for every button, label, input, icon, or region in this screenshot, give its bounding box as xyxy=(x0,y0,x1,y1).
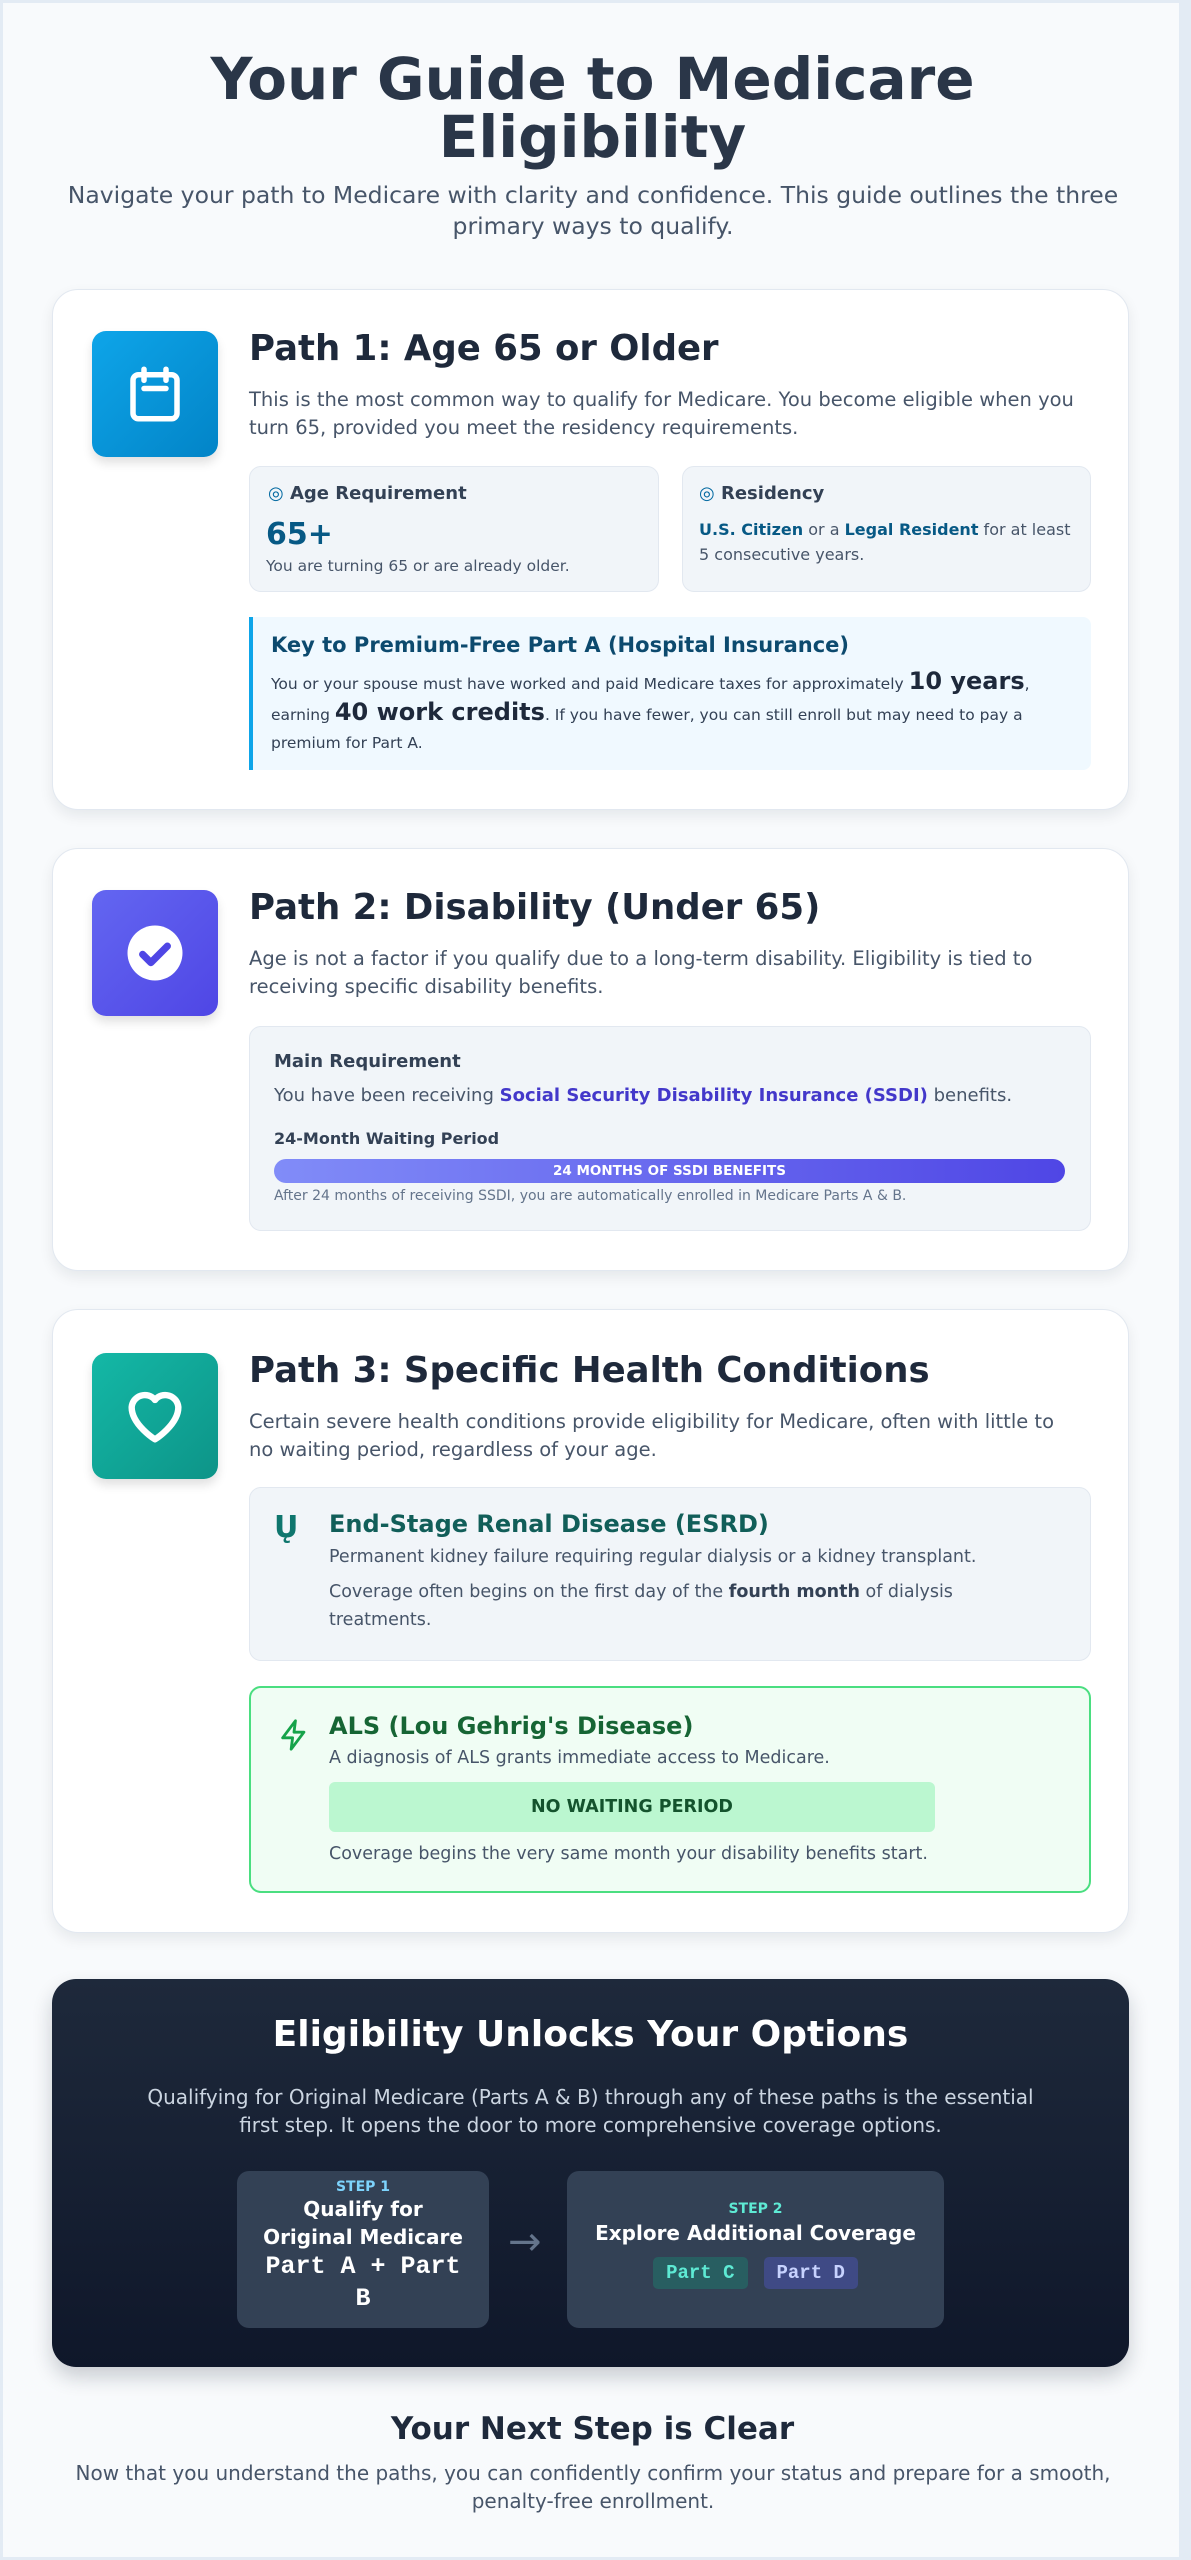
step 1: Original Medicare xyxy=(263,2225,463,2249)
requirement box xyxy=(249,1026,1091,1231)
heading: Path 3: Specific Health Conditions xyxy=(249,1350,930,1391)
footer text: Now that you understand the paths, you can confidently confirm your status and prepare for a smooth, penalty-free enrollment. xyxy=(76,2461,1110,2513)
heading: Eligibility Unlocks Your Options xyxy=(273,2014,908,2055)
panel: path 1 xyxy=(52,289,1129,810)
panel: eligibility unlocks options xyxy=(52,1979,1129,2367)
requirement box: Main Requirement xyxy=(274,1051,461,1072)
ESRD box: Permanent kidney failure requiring regular dialysis or a kidney transplant. xyxy=(329,1547,976,1567)
age requirement box xyxy=(249,466,659,592)
residency box: U.S. Citizen or a Legal Resident for at least 5 consecutive years. xyxy=(699,520,1071,564)
residency box xyxy=(682,466,1091,592)
title xyxy=(210,45,975,171)
progress bar: 24 MONTHS OF SSDI BENEFITS xyxy=(553,1163,786,1179)
step 2: STEP 2 xyxy=(728,2201,783,2217)
ESRD box: End-Stage Renal Disease (ESRD) xyxy=(329,1510,769,1538)
ESRD box: Coverage often begins on the first day of the fourth month of dialysis treatments. xyxy=(329,1582,953,1630)
step 1 xyxy=(237,2171,489,2328)
callout: premium-free part A: Key to Premium-Free Part A (Hospital Insurance) xyxy=(271,633,849,657)
step 1: Qualify for xyxy=(303,2197,423,2221)
text: Qualifying for Original Medicare (Parts A & B) through any of these paths is the essential first step. It opens the door to more comprehensive coverage options. xyxy=(147,2085,1034,2137)
badge: no waiting period xyxy=(329,1782,935,1832)
icon: calendar xyxy=(92,331,218,457)
residency box: ◎ Residency xyxy=(699,483,824,504)
icon: lightning xyxy=(281,1719,306,1751)
badge: no waiting period: NO WAITING PERIOD xyxy=(531,1797,733,1817)
step 2: Part C xyxy=(666,2262,734,2284)
ALS box: A diagnosis of ALS grants immediate access to Medicare. xyxy=(329,1748,830,1768)
requirement box: After 24 months of receiving SSDI, you are automatically enrolled in Medicare Parts A & B. xyxy=(274,1188,906,1204)
heading: Path 1: Age 65 or Older xyxy=(249,328,719,369)
panel: path 2 xyxy=(52,848,1129,1271)
step 2: Explore Additional Coverage xyxy=(595,2221,916,2245)
footer heading: Your Next Step is Clear xyxy=(391,2411,794,2447)
text: This is the most common way to qualify for Medicare. You become eligible when you turn 65, provided you meet the residency requirements. xyxy=(249,388,1074,439)
ALS box xyxy=(249,1686,1091,1893)
step 2 xyxy=(567,2171,944,2328)
ESRD box xyxy=(249,1487,1091,1661)
icon: heart xyxy=(92,1353,218,1479)
icon: check xyxy=(92,890,218,1016)
progress bar xyxy=(274,1159,1065,1183)
heading: Path 2: Disability (Under 65) xyxy=(249,887,820,928)
title: Eligibility xyxy=(439,103,746,171)
subtitle: Navigate your path to Medicare with clarity and confidence. This guide outlines the three primary ways to qualify. xyxy=(68,181,1118,240)
requirement box: 24-Month Waiting Period xyxy=(274,1129,499,1148)
text: Age is not a factor if you qualify due to a long-term disability. Eligibility is tied to receiving specific disability benefits. xyxy=(249,947,1032,998)
age requirement box: 65+ xyxy=(266,517,333,552)
panel: path 3 xyxy=(52,1309,1129,1933)
ALS box: Coverage begins the very same month your disability benefits start. xyxy=(329,1844,928,1864)
step 1: Part A + Part B xyxy=(265,2252,461,2313)
arrow: → xyxy=(508,2219,542,2265)
callout: premium-free part A xyxy=(249,617,1091,770)
age requirement box: ◎ Age Requirement xyxy=(268,483,467,504)
requirement box: You have been receiving Social Security Disability Insurance (SSDI) benefits. xyxy=(274,1085,1012,1106)
step 1: STEP 1 xyxy=(336,2179,390,2195)
icon: kidney: Ų xyxy=(274,1510,298,1545)
age requirement box: You are turning 65 or are already older. xyxy=(266,557,570,575)
text: Certain severe health conditions provide eligibility for Medicare, often with little to no waiting period, regardless of your age. xyxy=(249,1410,1054,1461)
step 2: Part D xyxy=(776,2262,845,2284)
title: Your Guide to Medicare xyxy=(210,45,975,113)
ALS box: ALS (Lou Gehrig's Disease) xyxy=(329,1712,693,1740)
callout: premium-free part A: You or your spouse must have worked and paid Medicare taxes for approximately 10 years, earning 40 work credits. If you have fewer, you can still enroll but may need to pay a premium for Part A. xyxy=(271,667,1030,752)
